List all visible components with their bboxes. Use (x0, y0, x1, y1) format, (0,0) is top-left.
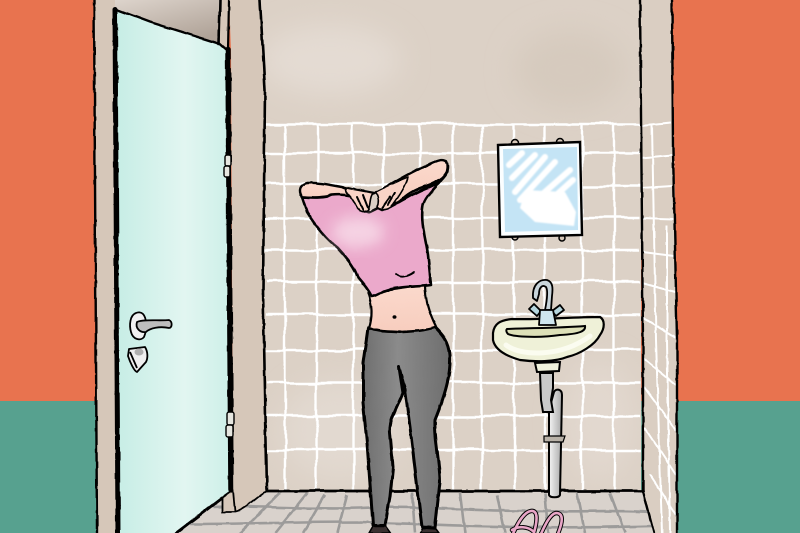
door hinge lower (226, 412, 234, 437)
door and room outlines (94, 0, 677, 533)
door frame post (220, 0, 229, 50)
fingers (357, 193, 395, 210)
back floor line (267, 490, 643, 492)
bare midriff (368, 285, 436, 332)
floor tile lines (190, 493, 652, 533)
slipper outlines (512, 511, 562, 533)
mirror (498, 138, 582, 241)
back right wall line (640, 0, 654, 533)
left wall strip (94, 0, 118, 533)
drain pipe (535, 362, 565, 497)
door right edge (228, 50, 231, 490)
legs in grey leggings (363, 327, 450, 528)
room: walls and floor (94, 0, 677, 533)
post line (228, 0, 229, 50)
top highlight (332, 216, 384, 248)
outer wall line (94, 0, 97, 533)
pink top (302, 172, 447, 296)
door (115, 9, 231, 533)
door frame top (115, 0, 220, 44)
hand left (346, 188, 373, 212)
background: teal lower band (0, 401, 800, 533)
basin shine (506, 336, 590, 353)
jamb right edge (260, 0, 267, 491)
mirror glass (503, 147, 578, 232)
door hinge upper (224, 155, 231, 177)
wall tile grid (264, 124, 640, 491)
door jamb (222, 0, 267, 512)
forearm right (377, 160, 448, 203)
basin bowl (506, 326, 585, 337)
back wall (259, 0, 641, 495)
door lock (128, 347, 147, 372)
shirt crease (396, 272, 414, 276)
hand right (375, 177, 408, 210)
person (300, 160, 450, 533)
wall shading (260, 25, 635, 480)
floor (176, 490, 654, 533)
basin (493, 317, 604, 361)
right orange edge line (672, 0, 677, 533)
faucet (529, 280, 564, 325)
mirror reflection (509, 153, 576, 226)
background: orange upper band (0, 0, 800, 401)
mirror frame (498, 142, 582, 237)
right wall strip (640, 0, 677, 533)
right wall tile grid (641, 123, 676, 533)
door top edge (115, 9, 227, 50)
door handle (130, 312, 172, 339)
navel (392, 315, 396, 319)
slippers (512, 511, 562, 533)
slipper straps (512, 511, 562, 533)
sink (493, 280, 604, 497)
frame line (219, 0, 220, 44)
shoes (369, 526, 439, 533)
mirror clips (512, 138, 565, 241)
forearm left (300, 183, 374, 200)
door bottom diagonal (176, 498, 222, 533)
jamb foot (222, 490, 267, 512)
door left edge (115, 9, 118, 533)
